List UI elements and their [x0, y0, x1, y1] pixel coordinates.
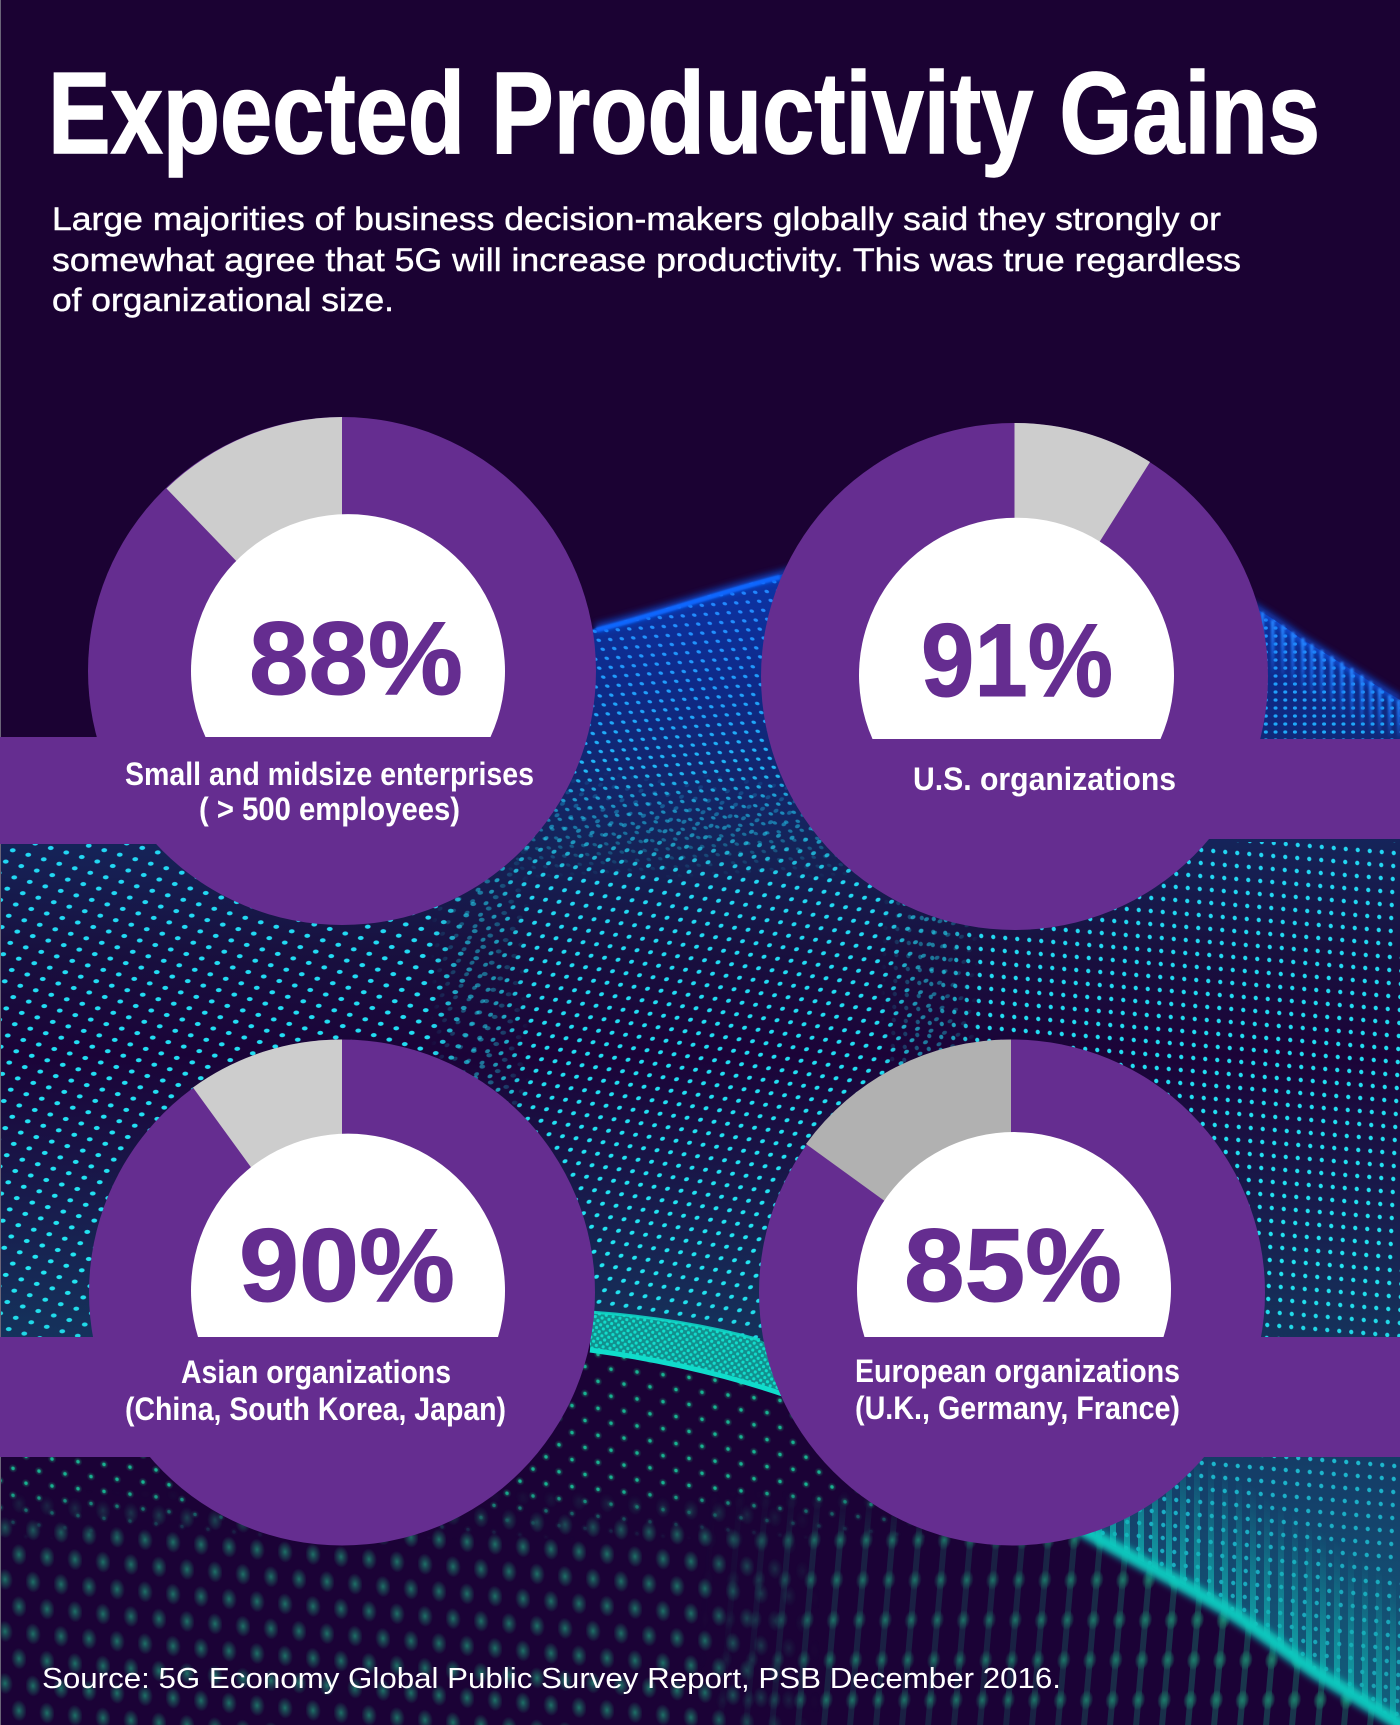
- label: ( > 500 employees): [199, 791, 460, 827]
- label band: [0, 737, 342, 844]
- gray remainder wedge: [166, 417, 342, 671]
- gray remainder wedge: [806, 1039, 1011, 1292]
- gray remainder wedge: [1014, 423, 1150, 676]
- label: [855, 1353, 1180, 1426]
- value: 88%: [249, 601, 463, 717]
- donut ring: [88, 417, 596, 925]
- label: European organizations: [855, 1353, 1180, 1389]
- white center: [859, 518, 1174, 739]
- donut ring: [759, 1040, 1265, 1546]
- value: 85%: [904, 1208, 1122, 1324]
- white center: [191, 514, 505, 737]
- label: [125, 756, 534, 827]
- white center: [191, 1134, 505, 1337]
- value: 90%: [239, 1208, 455, 1324]
- white center: [857, 1132, 1171, 1337]
- label: Asian organizations: [181, 1354, 451, 1390]
- background: dotted wave surface: [1, 564, 1400, 1725]
- label band: [1014, 739, 1400, 839]
- intro paragraph: [52, 201, 1241, 318]
- label band: [1011, 1337, 1400, 1457]
- label band: [0, 1337, 342, 1457]
- panel: European organizations, 85%: [759, 1039, 1400, 1546]
- edge line: [0, 0, 1, 1725]
- gray remainder wedge: [193, 1039, 342, 1292]
- label: Small and midsize enterprises: [125, 756, 534, 792]
- panel: U.S. organizations, 91%: [761, 423, 1400, 930]
- label: U.S. organizations: [913, 761, 1176, 797]
- label: [125, 1354, 506, 1427]
- value: 91%: [921, 603, 1113, 719]
- panel: small and midsize enterprises, 88%: [0, 417, 596, 925]
- intro paragraph: Large majorities of business decision-makers globally said they strongly or: [52, 201, 1221, 237]
- panel: Asian organizations, 90%: [0, 1039, 595, 1546]
- label: (China, South Korea, Japan): [125, 1391, 506, 1427]
- intro paragraph: somewhat agree that 5G will increase productivity. This was true regardless: [52, 242, 1241, 278]
- label: (U.K., Germany, France): [855, 1390, 1180, 1426]
- donut ring: [761, 423, 1268, 930]
- intro paragraph: of organizational size.: [52, 282, 394, 318]
- source note: Source: 5G Economy Global Public Survey Report, PSB December 2016.: [42, 1663, 1061, 1695]
- donut ring: [89, 1040, 595, 1546]
